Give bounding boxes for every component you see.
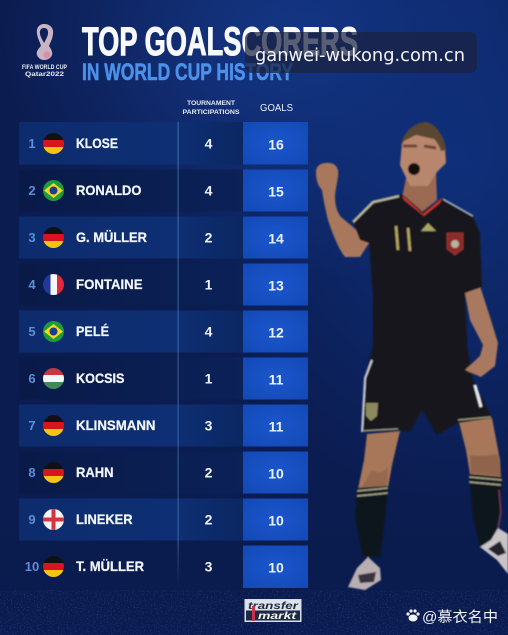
row 3: G. Müller: [19, 216, 308, 258]
row 4: Fontaine: [19, 264, 308, 306]
logo: FIFA World Cup Qatar 2022: [22, 24, 67, 78]
player: Klose celebrating: [316, 122, 508, 590]
row 9: Lineker: 10: [268, 512, 284, 528]
row 9: Lineker: [19, 498, 308, 540]
row 5: Pelé: 4: [205, 324, 213, 340]
neck: [402, 170, 437, 212]
row 5: Pelé: PELÉ: [76, 323, 109, 339]
right leg: [459, 418, 508, 574]
adidas mark: [421, 223, 436, 231]
jersey number 11: [396, 226, 410, 251]
jersey: [353, 194, 482, 349]
row 5: Pelé: 5: [28, 324, 36, 339]
row 6: Kocsis: [19, 358, 308, 400]
row 2: Ronaldo: RONALDO: [76, 182, 142, 198]
row 8: Rahn: [19, 452, 308, 494]
row 4: Fontaine: FONTAINE: [76, 276, 142, 292]
row 3: G. Müller: G. MÜLLER: [76, 229, 147, 245]
column heading: tournament participations: TOURNAMENT: [187, 100, 236, 107]
logo: FIFA World Cup Qatar 2022: Qatar2022: [25, 71, 64, 78]
row 5: Pelé: 12: [268, 324, 284, 340]
row 4: Fontaine: 1: [205, 276, 213, 292]
title: TOP GOALSCORERS: [82, 20, 358, 64]
column heading: goals: GOALS: [260, 103, 293, 114]
row 1: Klose: [19, 122, 308, 164]
row 5: Pelé: [19, 310, 308, 352]
credit watermark: @慕衣名中: [422, 609, 498, 626]
icon: paw: [406, 609, 420, 622]
row 6: Kocsis: 6: [28, 371, 36, 386]
row 3: G. Müller: 2: [205, 230, 213, 246]
raised arm with fist: [316, 163, 369, 257]
row 2: Ronaldo: [19, 170, 308, 212]
logo: FIFA World Cup Qatar 2022: FIFA WORLD CUP: [22, 65, 67, 71]
row 10: T. Müller: 3: [205, 558, 213, 574]
row 1: Klose: 16: [268, 136, 284, 152]
row 1: Klose: 4: [205, 136, 213, 152]
left leg: [348, 431, 400, 590]
row 3: G. Müller: 3: [28, 230, 36, 245]
row 4: Fontaine: 13: [268, 278, 284, 294]
row 9: Lineker: LINEKER: [76, 511, 132, 527]
row 7: Klinsmann: 3: [205, 418, 213, 434]
row 9: Lineker: 2: [205, 512, 213, 528]
logo: transfermarkt: markt: [258, 611, 297, 622]
row 1: Klose: 1: [28, 136, 36, 151]
row 9: Lineker: 9: [28, 512, 36, 527]
row 7: Klinsmann: 7: [28, 418, 36, 433]
head: [400, 122, 446, 186]
germany crest: [447, 233, 463, 255]
column heading: tournament participations: PARTICIPATIONS: [182, 109, 240, 116]
shorts: [362, 344, 492, 435]
row 7: Klinsmann: KLINSMANN: [76, 417, 156, 433]
logo: transfermarkt: [244, 599, 302, 622]
watermark banner: ganwei-wukong.com.cn: [255, 46, 465, 66]
row 8: Rahn: RAHN: [76, 464, 114, 480]
row 6: Kocsis: 1: [205, 370, 213, 386]
row 4: Fontaine: 4: [28, 277, 36, 292]
row 6: Kocsis: KOCSIS: [76, 370, 124, 386]
row 10: T. Müller: 10: [25, 559, 39, 574]
table: [19, 122, 308, 588]
row 8: Rahn: 8: [28, 465, 36, 480]
logo: transfermarkt: transfer: [248, 601, 299, 612]
row 7: Klinsmann: 11: [269, 418, 284, 434]
row 2: Ronaldo: 15: [268, 184, 284, 200]
row 6: Kocsis: 11: [269, 372, 284, 388]
watermark banner: [245, 32, 477, 73]
row 10: T. Müller: 10: [268, 560, 284, 576]
right arm: [465, 286, 498, 377]
row 8: Rahn: 2: [205, 464, 213, 480]
row 2: Ronaldo: 2: [28, 183, 36, 198]
column heading: tournament participations: [182, 100, 240, 116]
subtitle: IN WORLD CUP HISTORY: [82, 59, 293, 86]
row 3: G. Müller: 14: [268, 230, 284, 246]
row 10: T. Müller: T. MÜLLER: [76, 558, 144, 574]
row 8: Rahn: 10: [268, 466, 284, 482]
row 1: Klose: KLOSE: [76, 135, 118, 151]
row 10: T. Müller: [25, 546, 308, 588]
row 7: Klinsmann: [19, 404, 308, 446]
row 2: Ronaldo: 4: [205, 182, 213, 198]
